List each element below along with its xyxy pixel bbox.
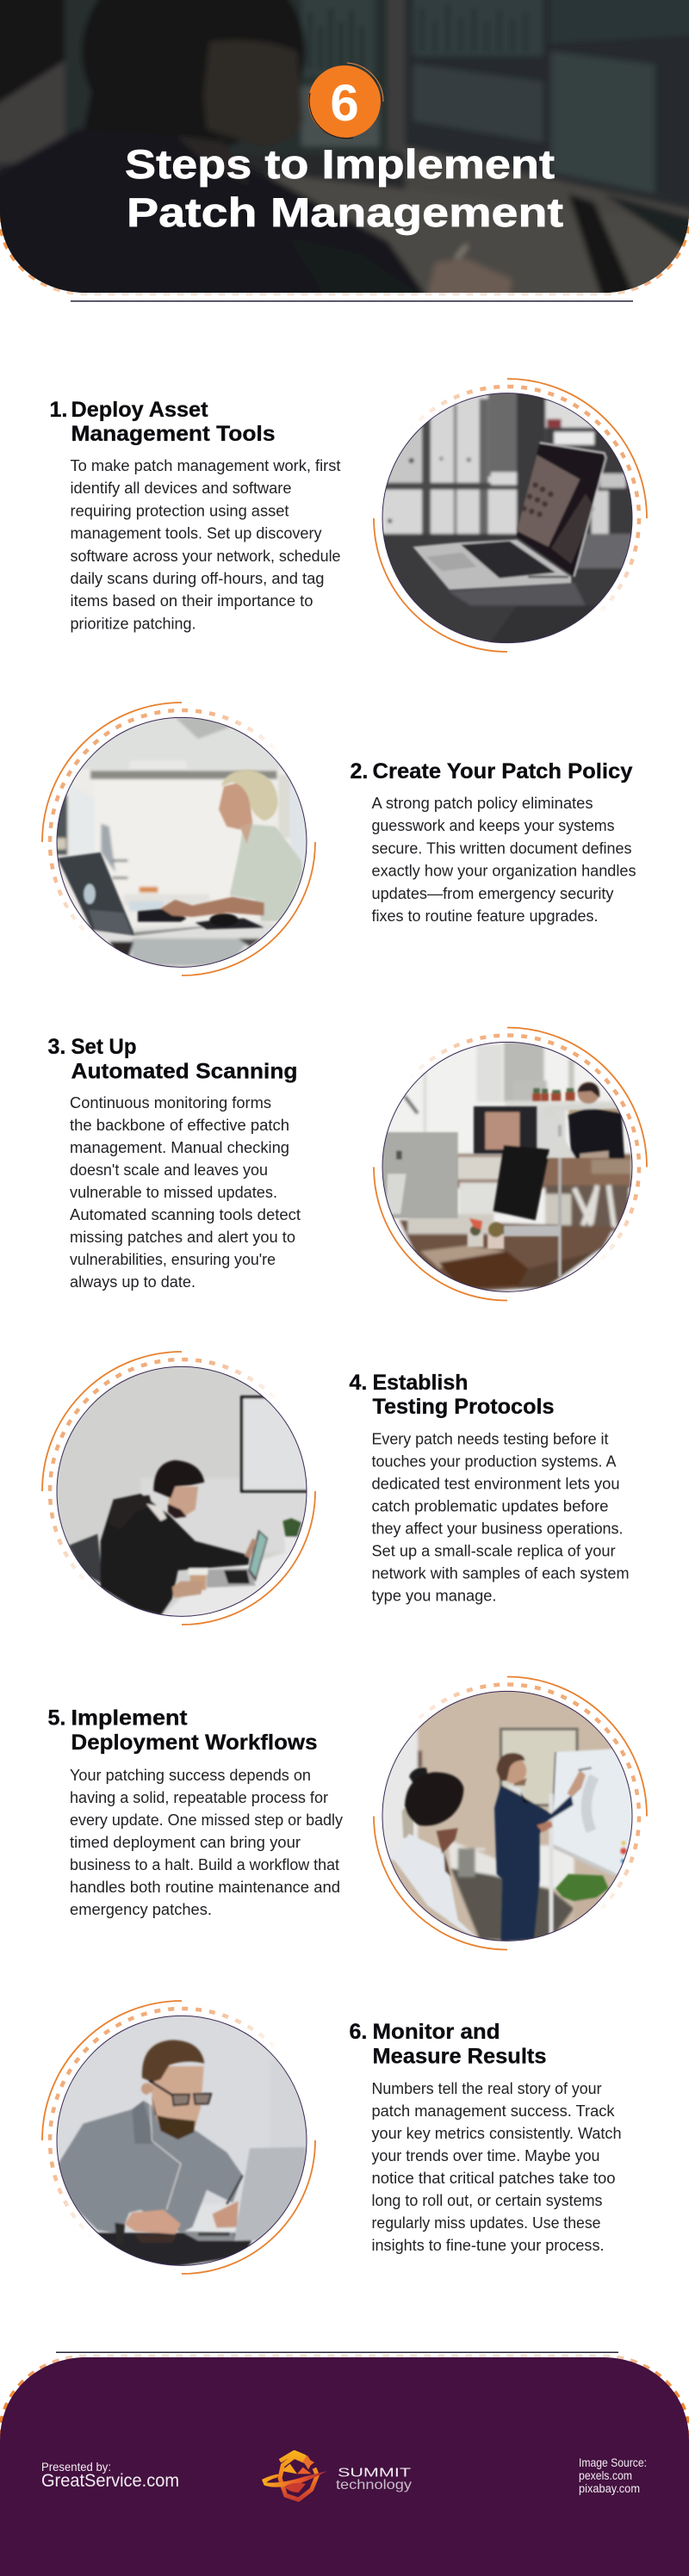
step 5 body text: having a solid, repeatable process for: [70, 1789, 328, 1806]
title: [125, 141, 563, 235]
step 2 heading: Create Your Patch Policy: [372, 759, 633, 783]
step 5 body text: [70, 1767, 343, 1918]
step 1 body text: To make patch management work, first: [71, 457, 341, 474]
logo emblem: [262, 2452, 327, 2499]
step 4 body text: Set up a small-scale replica of your: [372, 1543, 616, 1560]
step 6 body text: patch management success. Track: [372, 2102, 616, 2120]
step 3 heading: 3.: [48, 1035, 65, 1059]
step 3 body text: management. Manual checking: [70, 1139, 289, 1156]
step 4 body text: they affect your business operations.: [372, 1520, 624, 1538]
step 4 heading: Establish: [372, 1371, 469, 1395]
step 1 body text: items based on their importance to: [71, 592, 313, 610]
presented by: [41, 2460, 179, 2491]
step 4 body text: catch problematic updates before: [372, 1498, 608, 1515]
step 1 body text: requiring protection using asset: [71, 502, 289, 519]
step 5: [48, 1677, 647, 1949]
step 6 body text: regularly miss updates. Use these: [372, 2214, 601, 2232]
step 1: [50, 379, 647, 652]
step 1 heading: 1.: [50, 398, 67, 422]
step 6 body text: [372, 2080, 622, 2254]
step 5 heading: 5.: [48, 1706, 65, 1731]
step 1 body text: management tools. Set up discovery: [71, 525, 322, 542]
step 6: [42, 2001, 622, 2274]
image source credits: pixabay.com: [579, 2482, 640, 2495]
step 1 body text: [71, 457, 341, 632]
step 6 heading: [350, 2020, 546, 2068]
step 6 body text: long to roll out, or certain systems: [372, 2192, 603, 2209]
logo: Summit Technology: SUMMIT: [338, 2466, 411, 2480]
logo: Summit Technology: [262, 2452, 412, 2499]
step 3 body text: Continuous monitoring forms: [70, 1094, 271, 1112]
step 1 heading: [50, 398, 276, 446]
step 3 heading: Automated Scanning: [71, 1059, 298, 1083]
hero decorative dashes: [0, 215, 689, 294]
step 3: [48, 1028, 647, 1300]
step 6 image ring: [42, 2001, 315, 2274]
step 4 heading: 4.: [350, 1371, 367, 1395]
step 2 body text: [372, 795, 636, 925]
step 4 body text: Every patch needs testing before it: [372, 1431, 608, 1448]
step 6 body text: insights to fine-tune your process.: [372, 2237, 605, 2254]
photo: presenter at whiteboard: [379, 1687, 637, 1946]
step 6 heading: 6.: [350, 2020, 367, 2044]
step 4 body text: touches your production systems. A: [372, 1453, 617, 1471]
photo: woman at laptop: [52, 715, 313, 973]
step 4 heading: [350, 1371, 555, 1419]
step 4 heading: Testing Protocols: [372, 1395, 555, 1419]
photo: man in hoodie at laptop: [52, 1363, 313, 1621]
number badge: [308, 63, 383, 139]
logo: Summit Technology: technology: [336, 2478, 412, 2492]
title: Steps to Implement: [125, 141, 555, 187]
step 4 body text: [372, 1431, 629, 1605]
step 5 heading: [48, 1706, 317, 1755]
step 4 body text: type you manage.: [372, 1588, 496, 1605]
step 5 body text: timed deployment can bring your: [70, 1834, 301, 1851]
step 2 body text: updates—from emergency security: [372, 885, 613, 902]
step 4 body text: dedicated test environment lets you: [372, 1476, 620, 1493]
step 3 body text: the backbone of effective patch: [70, 1117, 289, 1134]
step 3 body text: Automated scanning tools detect: [70, 1206, 301, 1223]
step 5 image ring: [374, 1677, 647, 1949]
step 5 body text: handles both routine maintenance and: [70, 1879, 340, 1896]
image source credits: [579, 2456, 647, 2495]
step 5 body text: Your patching success depends on: [70, 1767, 311, 1784]
step 6 body text: notice that critical patches take too: [372, 2170, 615, 2187]
image source credits: Image Source:: [579, 2456, 647, 2469]
step 2: [42, 703, 636, 975]
step 3 body text: vulnerabilities, ensuring you're: [70, 1251, 276, 1268]
step 5 body text: emergency patches.: [70, 1901, 212, 1918]
step 3 body text: doesn't scale and leaves you: [70, 1161, 268, 1179]
step 3 heading: [48, 1035, 298, 1083]
step 2 body text: exactly how your organization handles: [372, 863, 636, 880]
header banner: [0, 0, 689, 301]
step 3 body text: [70, 1094, 301, 1291]
step 5 heading: Implement: [71, 1706, 188, 1731]
step 6 body text: your key metrics consistently. Watch: [372, 2125, 622, 2142]
step 1 heading: Deploy Asset: [71, 398, 208, 422]
step 3 body text: vulnerable to missed updates.: [70, 1184, 277, 1201]
step 2 heading: 2.: [350, 759, 368, 783]
step 6 body text: Numbers tell the real story of your: [372, 2080, 602, 2097]
step 6 heading: Monitor and: [372, 2020, 500, 2044]
footer panel: [0, 2356, 689, 2576]
photo: laptop on desk: [379, 390, 637, 648]
step 4 body text: network with samples of each system: [372, 1565, 629, 1582]
hero photo: analyst at monitors: [0, 0, 689, 301]
step 2 image ring: [42, 703, 315, 975]
presented by: GreatService.com: [41, 2471, 179, 2491]
presented by: Presented by:: [41, 2460, 111, 2474]
title: Patch Management: [127, 189, 563, 235]
footer decorative dashes: [0, 2356, 689, 2437]
photo: man with glasses at laptop: [52, 2012, 313, 2270]
step 6 heading: Measure Results: [372, 2044, 546, 2068]
step 5 body text: every update. One missed step or badly: [70, 1811, 343, 1829]
step 1 heading: Management Tools: [71, 422, 276, 446]
step 1 body text: daily scans during off-hours, and tag: [71, 570, 324, 587]
step 2 body text: fixes to routine feature upgrades.: [372, 907, 598, 925]
step 3 heading: Set Up: [71, 1035, 136, 1059]
step 1 body text: identify all devices and software: [71, 480, 291, 497]
step 3 image ring: [374, 1028, 647, 1300]
number badge: 6: [330, 74, 359, 132]
step 1 image ring: [374, 379, 647, 652]
step 6 body text: your trends over time. Maybe you: [372, 2147, 599, 2164]
step 1 body text: software across your network, schedule: [71, 548, 341, 565]
step 2 body text: A strong patch policy eliminates: [372, 795, 593, 812]
photo: open-plan office: [379, 1039, 637, 1297]
step 5 heading: Deployment Workflows: [71, 1731, 317, 1755]
step 5 body text: business to a halt. Build a workflow that: [70, 1856, 339, 1873]
step 2 body text: guesswork and keeps your systems: [372, 817, 615, 834]
step 2 body text: secure. This written document defines: [372, 839, 632, 857]
step 4: [42, 1352, 629, 1625]
step 3 body text: always up to date.: [70, 1273, 196, 1291]
step 4 image ring: [42, 1352, 315, 1625]
step 1 body text: prioritize patching.: [71, 615, 196, 632]
image source credits: pexels.com: [579, 2469, 632, 2482]
step 3 body text: missing patches and alert you to: [70, 1229, 295, 1246]
